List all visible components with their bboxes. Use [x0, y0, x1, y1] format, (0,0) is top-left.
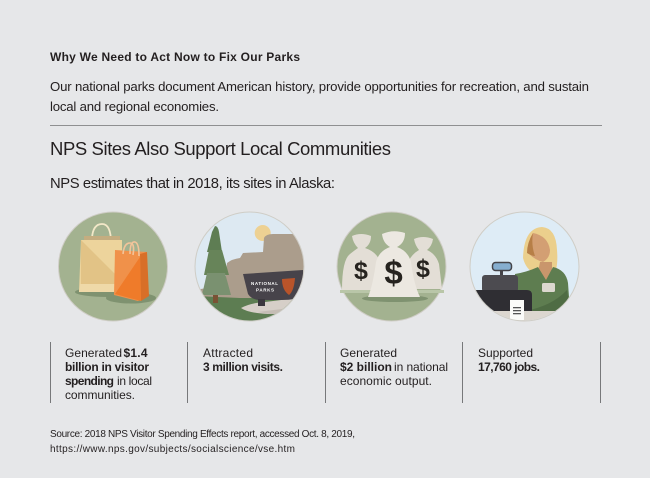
- icon: national park sign: PARKS: [256, 288, 274, 292]
- caption: visitor spending: in local: [117, 374, 152, 388]
- source note: [50, 429, 355, 455]
- caption: economic output: [340, 346, 448, 388]
- icon: shopping bags: [58, 212, 168, 321]
- subheading: NPS estimates that in 2018, its sites in Alaska:: [50, 176, 335, 192]
- caption: visitor spending: [65, 346, 152, 402]
- caption: economic output: Generated: [340, 346, 397, 360]
- caption: visits: 3 million visits.: [203, 360, 283, 374]
- icon: money bags: [337, 212, 446, 321]
- caption: visits: Attracted: [203, 346, 253, 360]
- column rule 3: [324, 342, 326, 403]
- caption: visits: [203, 346, 283, 374]
- column rule 5: [600, 342, 602, 403]
- intro paragraph: [50, 79, 589, 114]
- caption: economic output: economic output.: [340, 374, 432, 388]
- caption: visitor spending: communities.: [65, 388, 135, 402]
- caption: economic output: in national: [394, 360, 448, 374]
- icon: money bags: $: [384, 254, 403, 291]
- source note: https://www.nps.gov/subjects/socialscience/vse.htm: [50, 444, 295, 455]
- caption: jobs: 17,760 jobs.: [478, 360, 540, 374]
- icon: national park sign: NATIONAL: [251, 281, 278, 286]
- icon: money bags: $: [416, 255, 430, 283]
- caption: economic output: $2 billion: [340, 360, 392, 374]
- column rule 1: [50, 342, 52, 403]
- section heading: NPS Sites Also Support Local Communities: [50, 138, 391, 159]
- column rule 4: [462, 342, 464, 403]
- icon: cashier: [470, 212, 580, 323]
- caption: jobs: [478, 346, 540, 374]
- caption: jobs: Supported: [478, 346, 533, 360]
- caption: visitor spending: $1.4: [124, 346, 148, 360]
- caption: visitor spending: Generated: [65, 346, 122, 360]
- caption: visitor spending: billion in visitor: [65, 360, 149, 374]
- title: Why We Need to Act Now to Fix Our Parks: [50, 50, 300, 64]
- caption: visitor spending: spending: [65, 374, 114, 388]
- column rule 2: [186, 342, 188, 403]
- icon: national park sign: [195, 212, 305, 325]
- source note: Source: 2018 NPS Visitor Spending Effects report, accessed Oct. 8, 2019,: [50, 429, 355, 440]
- intro paragraph: Our national parks document American history, provide opportunities for recreation, and sustain: [50, 79, 589, 94]
- intro paragraph: local and regional economies.: [50, 99, 219, 114]
- icon: money bags: $: [354, 257, 368, 285]
